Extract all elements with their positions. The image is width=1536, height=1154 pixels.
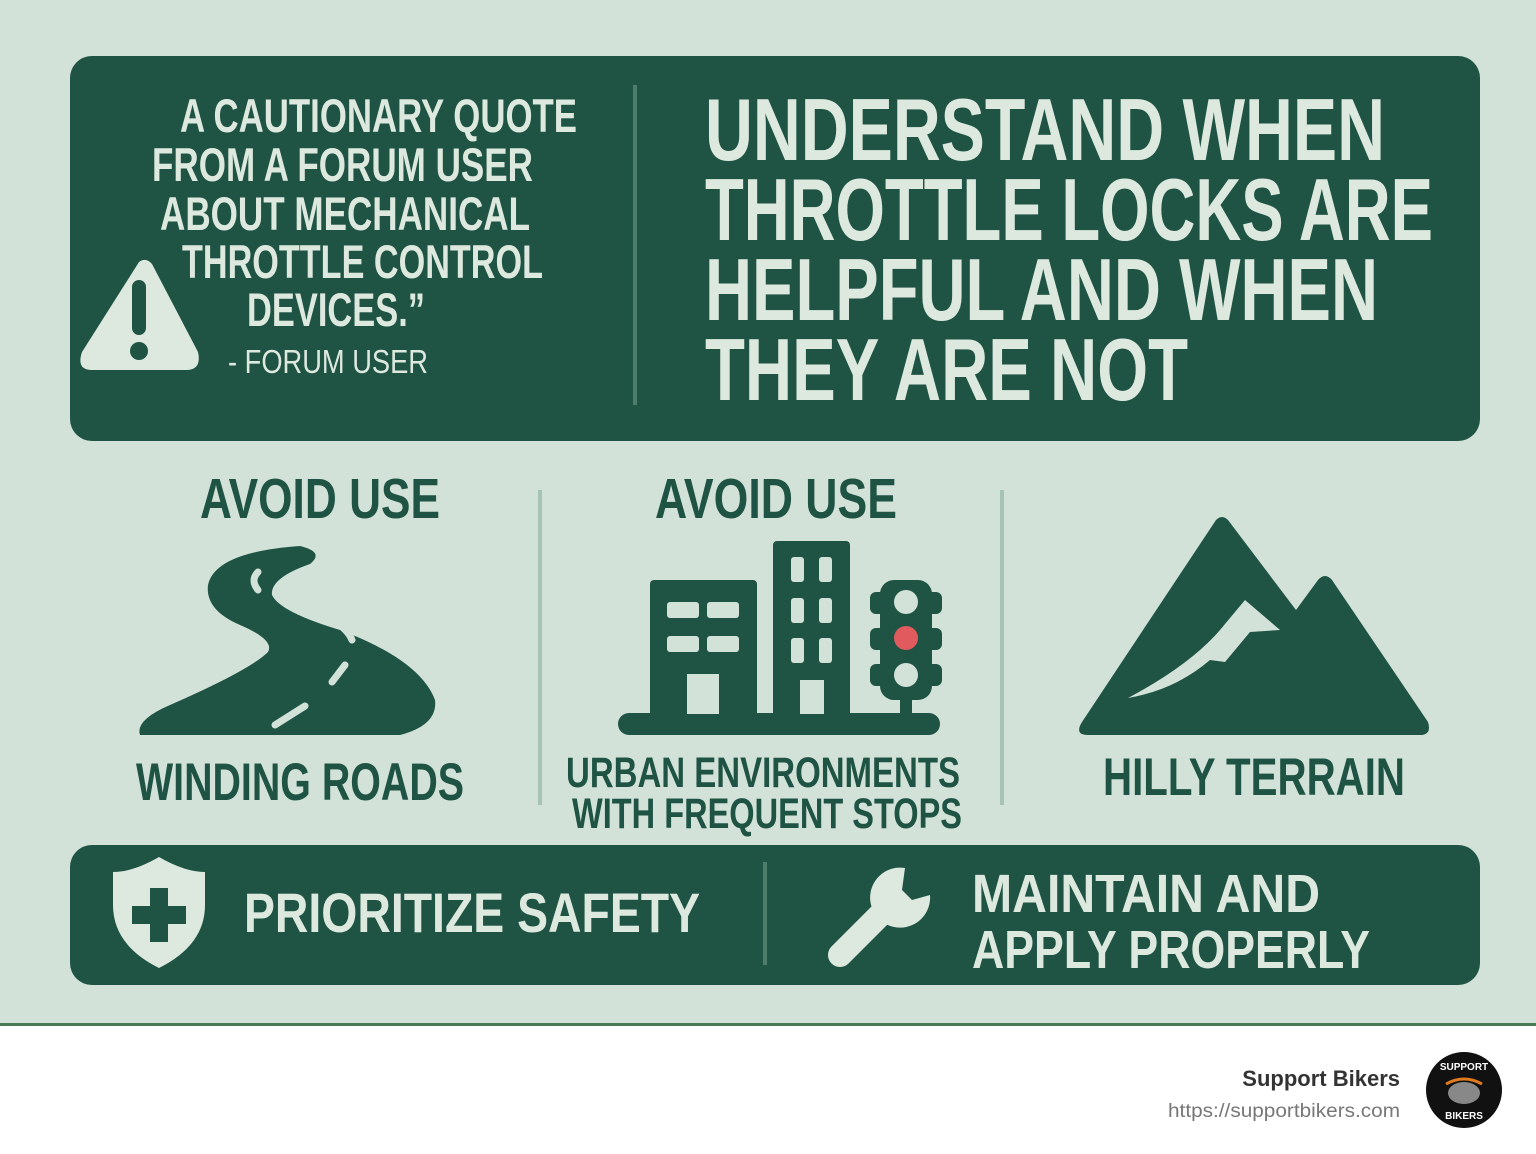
panel: winding roads bbox=[136, 467, 464, 812]
panel: urban: AVOID USE bbox=[655, 467, 897, 531]
footer brand bbox=[1168, 1052, 1502, 1128]
quote text: - FORUM USER bbox=[228, 343, 428, 380]
panel: winding roads: WINDING ROADS bbox=[136, 753, 464, 812]
panel: urban: WITH FREQUENT STOPS bbox=[572, 790, 962, 838]
quote text: ABOUT MECHANICAL bbox=[160, 187, 530, 240]
panel: urban: URBAN ENVIRONMENTS bbox=[566, 749, 960, 797]
quote text: THROTTLE CONTROL bbox=[182, 235, 543, 288]
panel: hilly terrain bbox=[1079, 517, 1429, 807]
footer brand: https://supportbikers.com bbox=[1168, 1101, 1400, 1122]
text: maintain bbox=[972, 864, 1370, 980]
icon: winding road bbox=[139, 546, 435, 735]
icon: city and traffic light bbox=[618, 541, 942, 735]
title bbox=[705, 80, 1433, 419]
panel: bottom actions bbox=[70, 845, 1480, 985]
text: maintain: APPLY PROPERLY bbox=[972, 920, 1370, 980]
icon: logo bbox=[1426, 1052, 1502, 1128]
text: maintain: MAINTAIN AND bbox=[972, 864, 1320, 924]
icon: warning triangle bbox=[80, 260, 199, 370]
quote text bbox=[152, 89, 577, 380]
panel: hilly terrain: HILLY TERRAIN bbox=[1103, 748, 1405, 807]
icon: logo: BIKERS bbox=[1445, 1111, 1483, 1122]
title: THEY ARE NOT bbox=[705, 320, 1188, 419]
panel: winding roads: AVOID USE bbox=[200, 467, 440, 531]
quote text: DEVICES.” bbox=[247, 283, 425, 336]
icon: logo: SUPPORT bbox=[1440, 1062, 1488, 1073]
quote text: A CAUTIONARY QUOTE bbox=[180, 89, 577, 142]
text: prioritize safety: PRIORITIZE SAFETY bbox=[244, 881, 700, 944]
icon: shield bbox=[113, 857, 205, 968]
quote text: FROM A FORUM USER bbox=[152, 138, 533, 191]
footer brand: Support Bikers bbox=[1242, 1066, 1400, 1091]
icon: mountains bbox=[1079, 517, 1429, 735]
icon: wrench bbox=[840, 868, 930, 955]
panel: urban bbox=[566, 467, 962, 838]
panel: header bbox=[70, 56, 1480, 441]
